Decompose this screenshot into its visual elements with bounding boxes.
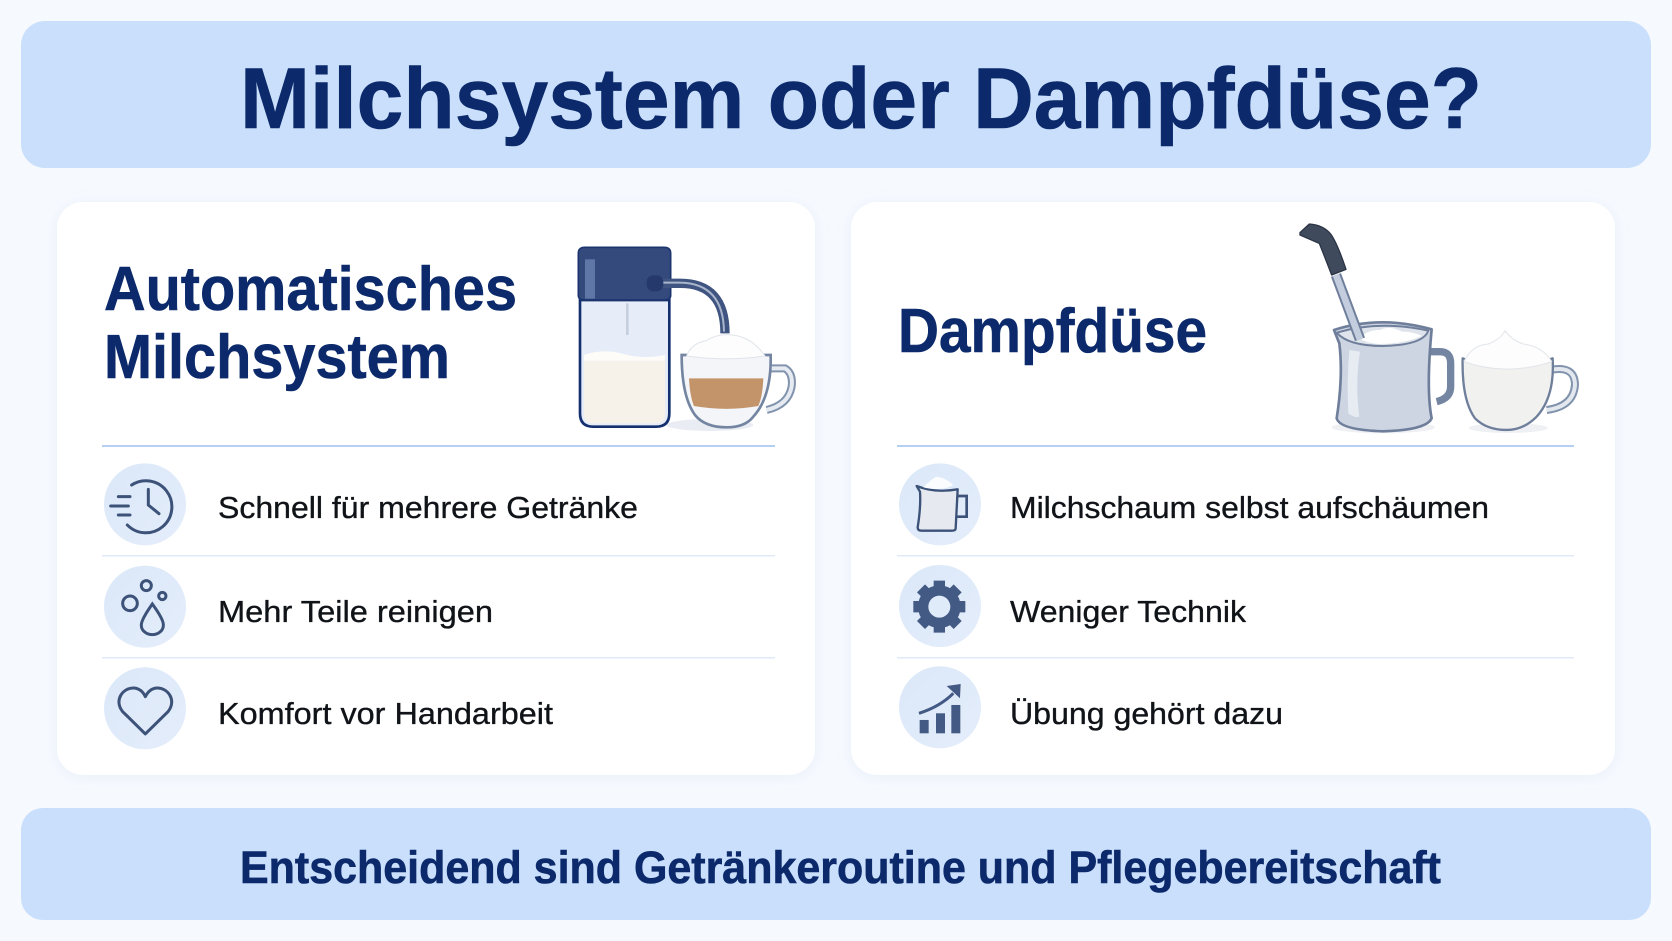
icon: bubbles and drop [104, 566, 186, 648]
title: Milchsystem oder Dampfdüse? [240, 51, 1482, 147]
icon: rising chart [899, 666, 981, 748]
heading: Automatisches Milchsystem: Automatisches [104, 255, 517, 324]
icon: fast clock [104, 463, 186, 545]
heading: Automatisches Milchsystem: Milchsystem [104, 323, 450, 392]
footer text: Entscheidend sind Getränkeroutine und Pflegebereitschaft [240, 842, 1441, 893]
icon: milk pitcher [899, 463, 981, 545]
label: Mehr Teile reinigen [218, 594, 493, 629]
panel: automatisches Milchsystem [57, 202, 815, 775]
icon: heart [104, 667, 186, 749]
row: Milchschaum [899, 463, 1489, 545]
label: Milchschaum selbst aufschäumen [1010, 490, 1489, 525]
label: Komfort vor Handarbeit [218, 696, 553, 731]
icon: gear [899, 565, 981, 647]
illustration: pitcher with steam wand and cup [1300, 224, 1575, 433]
label: Übung gehört dazu [1010, 696, 1283, 731]
illustration: milk jar with cup [578, 247, 792, 431]
row: Reinigen [104, 566, 493, 648]
panel: Dampfdüse [851, 202, 1615, 775]
footer banner [21, 808, 1651, 920]
label: Schnell für mehrere Getränke [218, 490, 638, 525]
divider [102, 445, 775, 447]
label: Weniger Technik [1010, 594, 1247, 629]
row: Übung [899, 666, 1283, 748]
divider [897, 445, 1574, 447]
title banner [21, 21, 1651, 168]
row: Schnell [104, 463, 638, 545]
heading: Automatisches Milchsystem [104, 255, 517, 392]
row: Technik [899, 565, 1247, 647]
row: Komfort [104, 667, 553, 749]
heading: Dampfdüse: Dampfdüse [898, 297, 1207, 366]
